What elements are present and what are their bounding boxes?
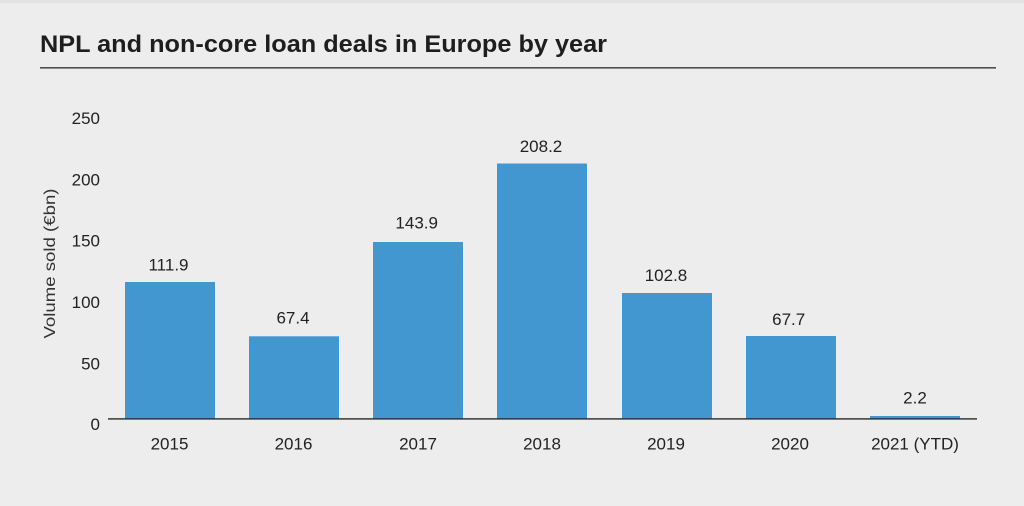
bar 2015 xyxy=(125,282,215,419)
value labels: 67.4 xyxy=(276,309,310,328)
x axis labels: 2019 xyxy=(647,435,685,454)
x axis labels: 2021 (YTD) xyxy=(871,435,959,454)
y axis labels: 150 xyxy=(72,232,100,251)
y axis labels: 100 xyxy=(72,293,100,312)
value labels: 67.7 xyxy=(772,310,805,329)
bar chart xyxy=(125,164,960,419)
y axis title: Volume sold (€bn) xyxy=(42,188,59,338)
x axis line xyxy=(108,418,977,420)
y axis labels: 200 xyxy=(72,170,100,190)
title: NPL and non-core loan deals in Europe by year xyxy=(40,31,607,58)
bar 2016 xyxy=(249,336,339,419)
y axis labels: 0 xyxy=(91,415,100,434)
x axis labels xyxy=(151,435,959,454)
bar 2017 xyxy=(373,242,463,419)
x axis labels: 2018 xyxy=(523,435,561,454)
y axis labels: 50 xyxy=(81,355,100,374)
x axis labels: 2020 xyxy=(771,435,809,454)
bar 2021 xyxy=(870,416,960,419)
value labels: 208.2 xyxy=(520,137,562,156)
bar 2019 xyxy=(622,293,712,419)
x axis labels: 2015 xyxy=(151,435,188,454)
value labels: 143.9 xyxy=(395,213,438,232)
x axis labels: 2016 xyxy=(275,435,312,454)
value labels: 111.9 xyxy=(148,255,189,274)
value labels xyxy=(148,137,927,408)
x axis labels: 2017 xyxy=(399,435,437,454)
value labels: 102.8 xyxy=(645,266,687,285)
y axis labels xyxy=(72,109,100,434)
bar 2020 xyxy=(746,336,836,419)
value labels: 2.2 xyxy=(903,389,927,408)
bar 2018 xyxy=(497,164,587,419)
y axis labels: 250 xyxy=(72,109,100,128)
